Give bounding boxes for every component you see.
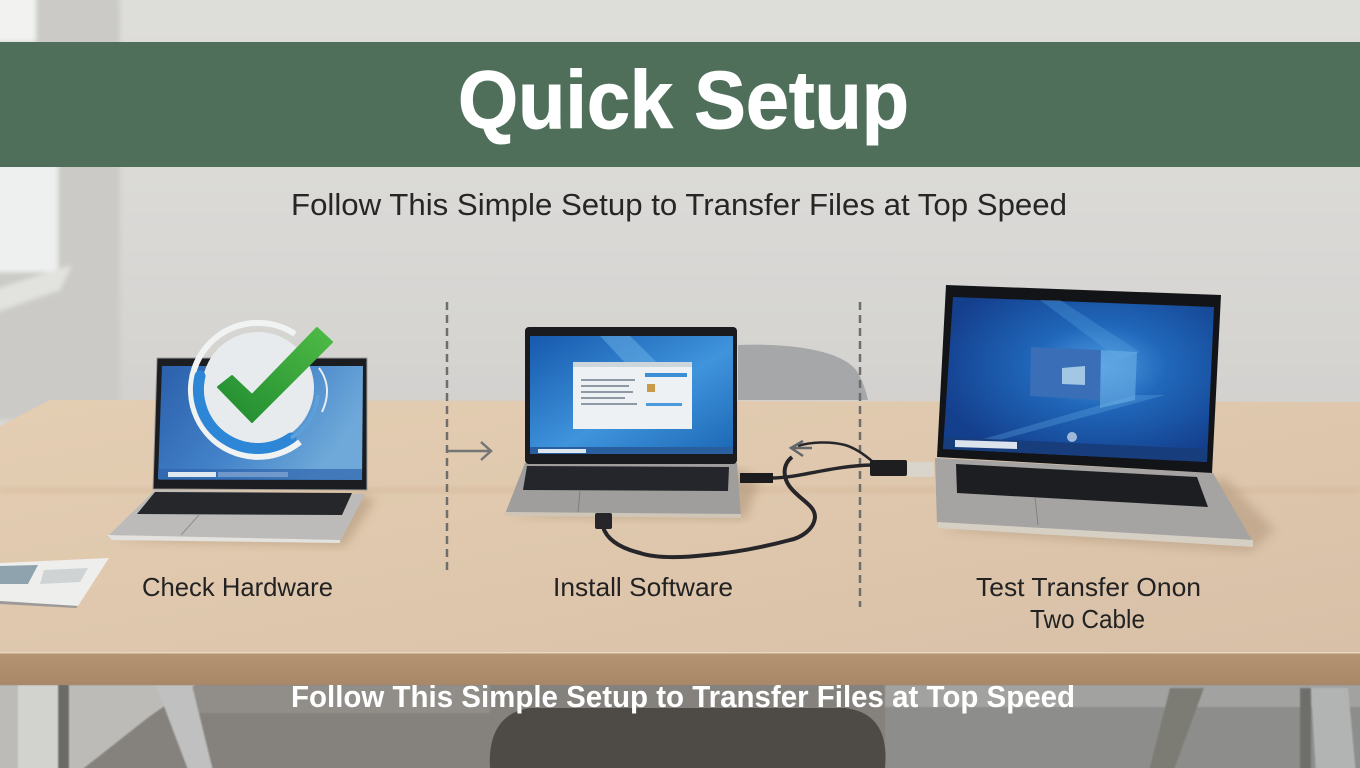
label: install software: Install Software xyxy=(553,572,733,602)
title: Quick Setup xyxy=(458,55,909,146)
divider: left xyxy=(446,302,448,572)
label: test transfer: Test Transfer Onon xyxy=(976,572,1201,602)
laptop: install software xyxy=(505,327,760,519)
arrow: left xyxy=(791,441,812,456)
footer tagline: Follow This Simple Setup to Transfer Files at Top Speed xyxy=(291,679,1075,714)
brochure on table xyxy=(0,558,109,608)
label: test transfer: Two Cable xyxy=(1030,604,1145,634)
laptop: check hardware xyxy=(107,358,375,546)
title band xyxy=(0,42,1360,167)
table xyxy=(0,400,1360,685)
divider: right xyxy=(859,302,861,607)
icon: green check in ring xyxy=(191,323,332,457)
background wall xyxy=(0,0,1360,420)
floor and table legs xyxy=(0,680,1360,768)
label: check hardware: Check Hardware xyxy=(142,572,333,602)
laptop: test transfer xyxy=(935,285,1275,552)
chair back xyxy=(738,345,868,400)
usb cable xyxy=(595,442,934,557)
arrow: right xyxy=(447,442,491,460)
label: test transfer xyxy=(976,572,1201,634)
subtitle: Follow This Simple Setup to Transfer Files at Top Speed xyxy=(291,187,1067,222)
chair seat xyxy=(490,708,886,768)
